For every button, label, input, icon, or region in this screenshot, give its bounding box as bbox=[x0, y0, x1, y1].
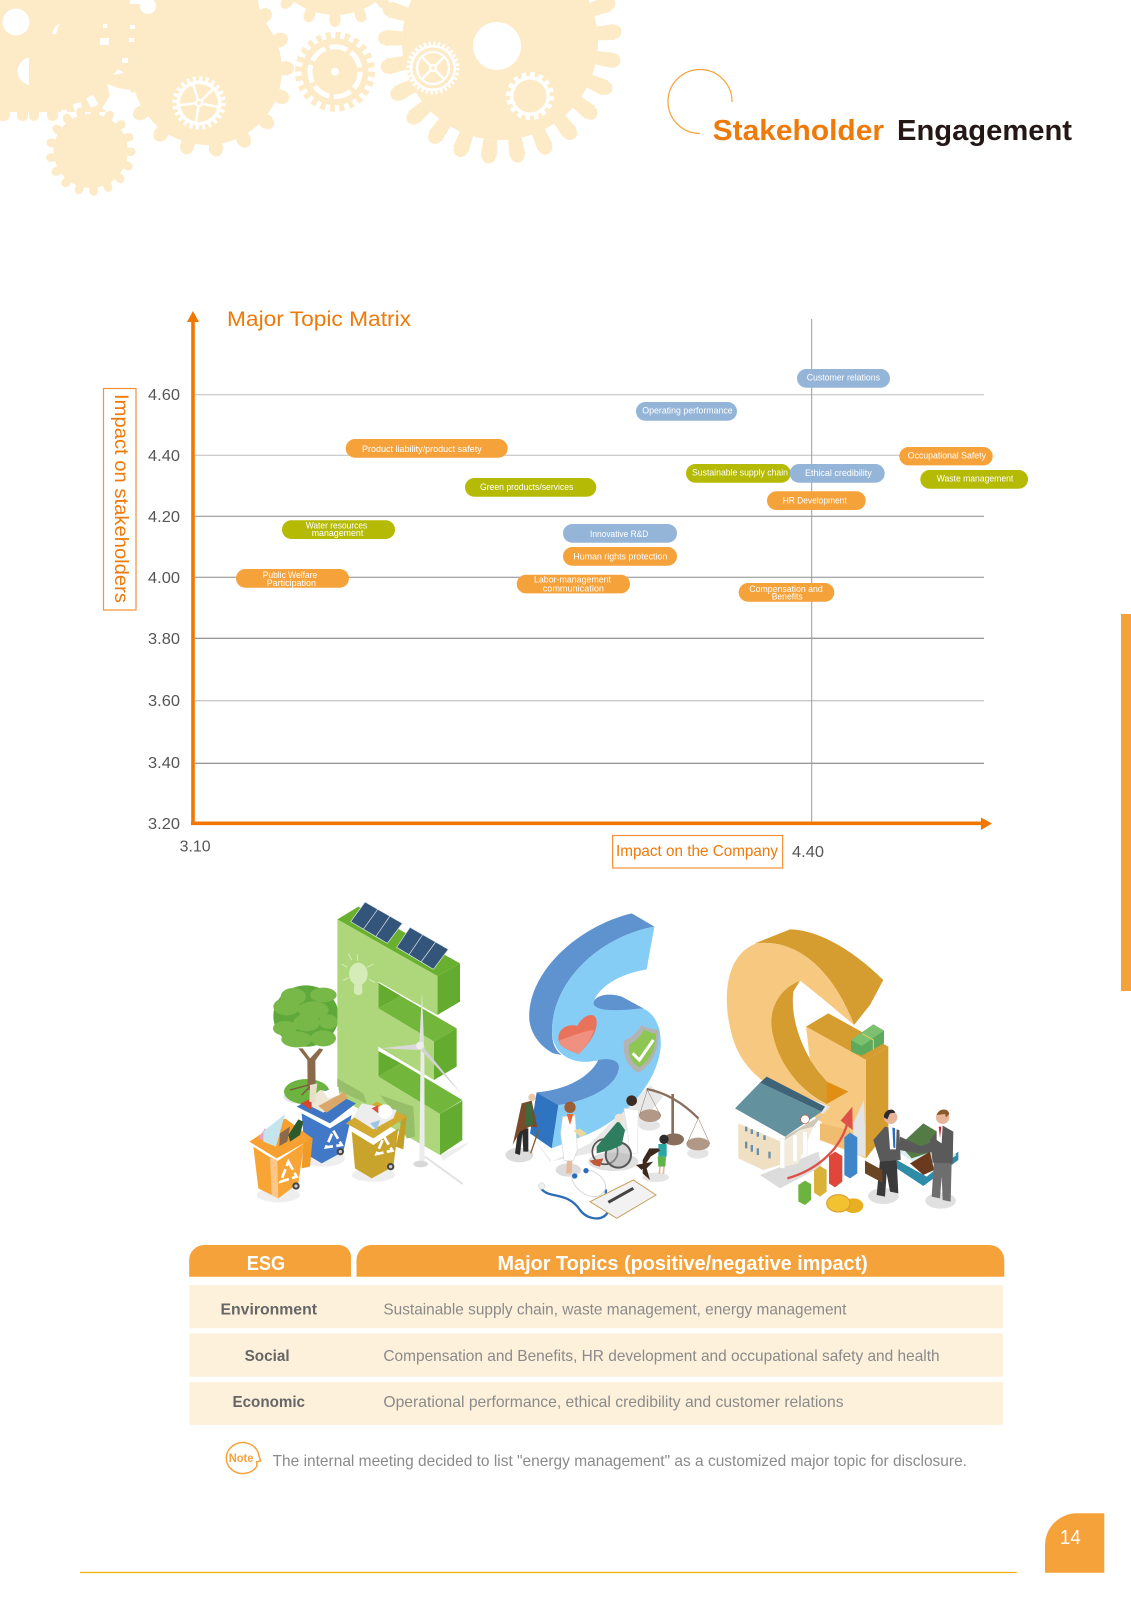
y-axis tick labels: 4.20 bbox=[148, 509, 180, 526]
icon: stethoscope bbox=[538, 1168, 608, 1218]
icon: money stack bbox=[851, 1024, 884, 1056]
pill: waste management: Waste management bbox=[937, 473, 1014, 484]
title word: Stakeholder: Stakeholder bbox=[713, 115, 884, 147]
gear: top centre bbox=[246, 0, 424, 34]
pill: public welfare: Public Welfare bbox=[263, 570, 317, 581]
y-axis tick labels: 4.60 bbox=[148, 387, 180, 404]
illustration: S for social bbox=[505, 913, 710, 1218]
pill: compensation bbox=[739, 583, 834, 603]
table row: Environment: Sustainable supply chain, waste management, energy management bbox=[383, 1301, 847, 1318]
pill: product liability bbox=[346, 439, 508, 458]
pill: labor-management: communication bbox=[543, 584, 604, 595]
ground shadow bbox=[440, 1142, 470, 1161]
x axis arrow bbox=[191, 821, 984, 825]
pill: waste management bbox=[920, 470, 1028, 489]
topic pills bbox=[236, 369, 1028, 603]
pill: labor-management: Labor-management bbox=[534, 575, 611, 586]
table row: Social: Social bbox=[245, 1348, 290, 1365]
illustration: G for governance bbox=[727, 929, 958, 1213]
table row: Social: Compensation and Benefits, HR development and occupational safety and health bbox=[383, 1348, 940, 1365]
icon: cog right on big gear bbox=[508, 74, 552, 118]
pill: public welfare: Participation bbox=[267, 578, 316, 589]
pill: water resources bbox=[282, 520, 395, 539]
table header: Major Topics: Major Topics (positive/negative impact) bbox=[498, 1252, 868, 1275]
pill: green products: Green products/services bbox=[480, 482, 574, 493]
figure: child and dog bbox=[636, 1135, 669, 1182]
icon: cog on middle gear bbox=[174, 78, 224, 128]
table row: Economic: Operational performance, ethical credibility and customer relations bbox=[383, 1394, 844, 1411]
figure: doctor bbox=[556, 1102, 587, 1177]
pill: human rights: Human rights protection bbox=[573, 551, 667, 562]
y-axis tick labels: 4.00 bbox=[148, 570, 180, 587]
pill: occupational safety bbox=[899, 447, 993, 465]
icon: law books bbox=[897, 1123, 958, 1186]
table row: Economic bbox=[189, 1382, 1003, 1425]
pill: HR development: HR Development bbox=[783, 495, 847, 506]
bin: yellow bbox=[346, 1102, 407, 1182]
side tab bbox=[1121, 614, 1131, 991]
icon: heart bbox=[558, 1015, 597, 1054]
y-axis tick labels bbox=[148, 387, 824, 861]
gear: middle bbox=[104, 0, 310, 173]
gear: big right bbox=[368, 0, 632, 174]
illustration: E for environment bbox=[249, 902, 470, 1202]
pill: sustainable supply chain bbox=[686, 464, 791, 483]
icon: note bubble bbox=[226, 1443, 260, 1474]
pill: operating performance: Operating performance bbox=[642, 405, 733, 416]
pill: compensation: Compensation and bbox=[749, 584, 823, 595]
pill: innovative R&D: Innovative R&D bbox=[590, 529, 648, 540]
pill: ethical credibility bbox=[790, 464, 885, 483]
bin: blue bbox=[297, 1083, 356, 1167]
pill: water resources: Water resources bbox=[306, 520, 368, 531]
icon: coins bbox=[827, 1195, 863, 1213]
table header: ESG bbox=[189, 1245, 351, 1277]
icon: cog left on big gear bbox=[408, 43, 458, 93]
pill: customer relations bbox=[797, 369, 890, 388]
table row: Environment: Environment bbox=[220, 1301, 318, 1318]
pill: labor-management bbox=[517, 575, 630, 595]
page number tab bbox=[1045, 1513, 1104, 1573]
pill: customer relations: Customer relations bbox=[807, 373, 880, 384]
y-axis tick labels: 3.60 bbox=[148, 693, 180, 710]
icon: wind turbine bbox=[380, 992, 463, 1184]
table row: Economic: Economic bbox=[232, 1394, 305, 1411]
pill: HR development bbox=[767, 491, 866, 510]
icon: light bulb bbox=[342, 953, 375, 995]
table header: ESG: ESG bbox=[247, 1252, 285, 1275]
figure: businessman left bbox=[865, 1110, 923, 1204]
icon: title arc bbox=[668, 69, 732, 134]
pill: innovative R&D bbox=[563, 524, 677, 543]
tree bbox=[273, 985, 339, 1104]
gear: lower small bbox=[49, 109, 132, 193]
bar chart bbox=[798, 1133, 857, 1205]
page number tab: 14 bbox=[1060, 1527, 1081, 1549]
pill: green products bbox=[465, 478, 596, 497]
note text: The internal meeting decided to list "energy management" as a customized major topic for disclosure. bbox=[273, 1453, 967, 1470]
icon: growth arrow bbox=[787, 1107, 853, 1178]
pill: ethical credibility: Ethical credibility bbox=[805, 468, 872, 479]
title word: Engagement: Engagement bbox=[897, 115, 1072, 147]
y-axis tick labels: 3.10 bbox=[180, 839, 211, 856]
y-axis label bbox=[104, 388, 136, 610]
y-axis label: Impact on stakeholders bbox=[110, 394, 132, 603]
y-axis tick labels: 3.40 bbox=[148, 755, 180, 772]
figure: elderly man bbox=[505, 1094, 539, 1162]
y-axis tick labels: 3.20 bbox=[148, 816, 180, 833]
chart: major topic matrix bbox=[104, 308, 1028, 868]
icon: ghost arrow bbox=[853, 1100, 865, 1157]
y axis arrow head bbox=[187, 311, 199, 322]
letter E bbox=[337, 907, 462, 1155]
pill: water resources: management bbox=[312, 528, 364, 539]
y-axis tick labels: 4.40 bbox=[148, 448, 180, 465]
decorative gear banner bbox=[0, 0, 632, 193]
y-axis tick labels: 4.40 bbox=[792, 844, 824, 861]
table row: Environment bbox=[189, 1285, 1003, 1328]
letter G bbox=[727, 929, 888, 1158]
pill: product liability: Product liability/product safety bbox=[362, 444, 482, 455]
white gaps between left gears bbox=[2, 0, 156, 119]
footnote bbox=[226, 1443, 967, 1474]
icon: clipboard bbox=[590, 1180, 656, 1218]
icon: note bubble: Note bbox=[229, 1453, 253, 1465]
chart heading: Major Topic Matrix bbox=[227, 308, 412, 331]
pill: operating performance bbox=[636, 402, 737, 421]
pill: compensation: Benefits bbox=[772, 592, 803, 603]
bin: orange bbox=[249, 1114, 313, 1202]
hole in big gear bbox=[473, 22, 521, 70]
x-axis label bbox=[613, 836, 783, 868]
figure: businessman right bbox=[916, 1109, 956, 1209]
letter S bbox=[529, 913, 661, 1148]
x axis arrow head bbox=[981, 818, 992, 830]
table header: Major Topics bbox=[356, 1245, 1004, 1277]
solar panels bbox=[351, 902, 448, 969]
y-axis tick labels: 3.80 bbox=[148, 631, 180, 648]
icon: bank building bbox=[735, 1077, 830, 1188]
gear: far left merged mass bbox=[0, 0, 262, 121]
y axis arrow bbox=[191, 322, 195, 823]
footer rule bbox=[80, 1572, 1017, 1574]
x-axis label: Impact on the Company bbox=[616, 843, 778, 860]
ground shadow bbox=[530, 1085, 663, 1162]
pill: human rights bbox=[563, 547, 677, 566]
table: ESG major topics bbox=[189, 1245, 1004, 1425]
icon: balance scales bbox=[639, 1089, 710, 1159]
pill: sustainable supply chain: Sustainable supply chain bbox=[692, 467, 788, 478]
figure: wheelchair and nurse bbox=[588, 1095, 638, 1171]
pill: public welfare bbox=[236, 569, 349, 589]
icon: shield bbox=[624, 1025, 659, 1073]
pill: occupational safety: Occupational Safety bbox=[908, 451, 986, 462]
table row: Social bbox=[189, 1333, 1003, 1377]
page title bbox=[668, 69, 1072, 147]
gear: small cog with dashed ring bbox=[298, 35, 372, 108]
